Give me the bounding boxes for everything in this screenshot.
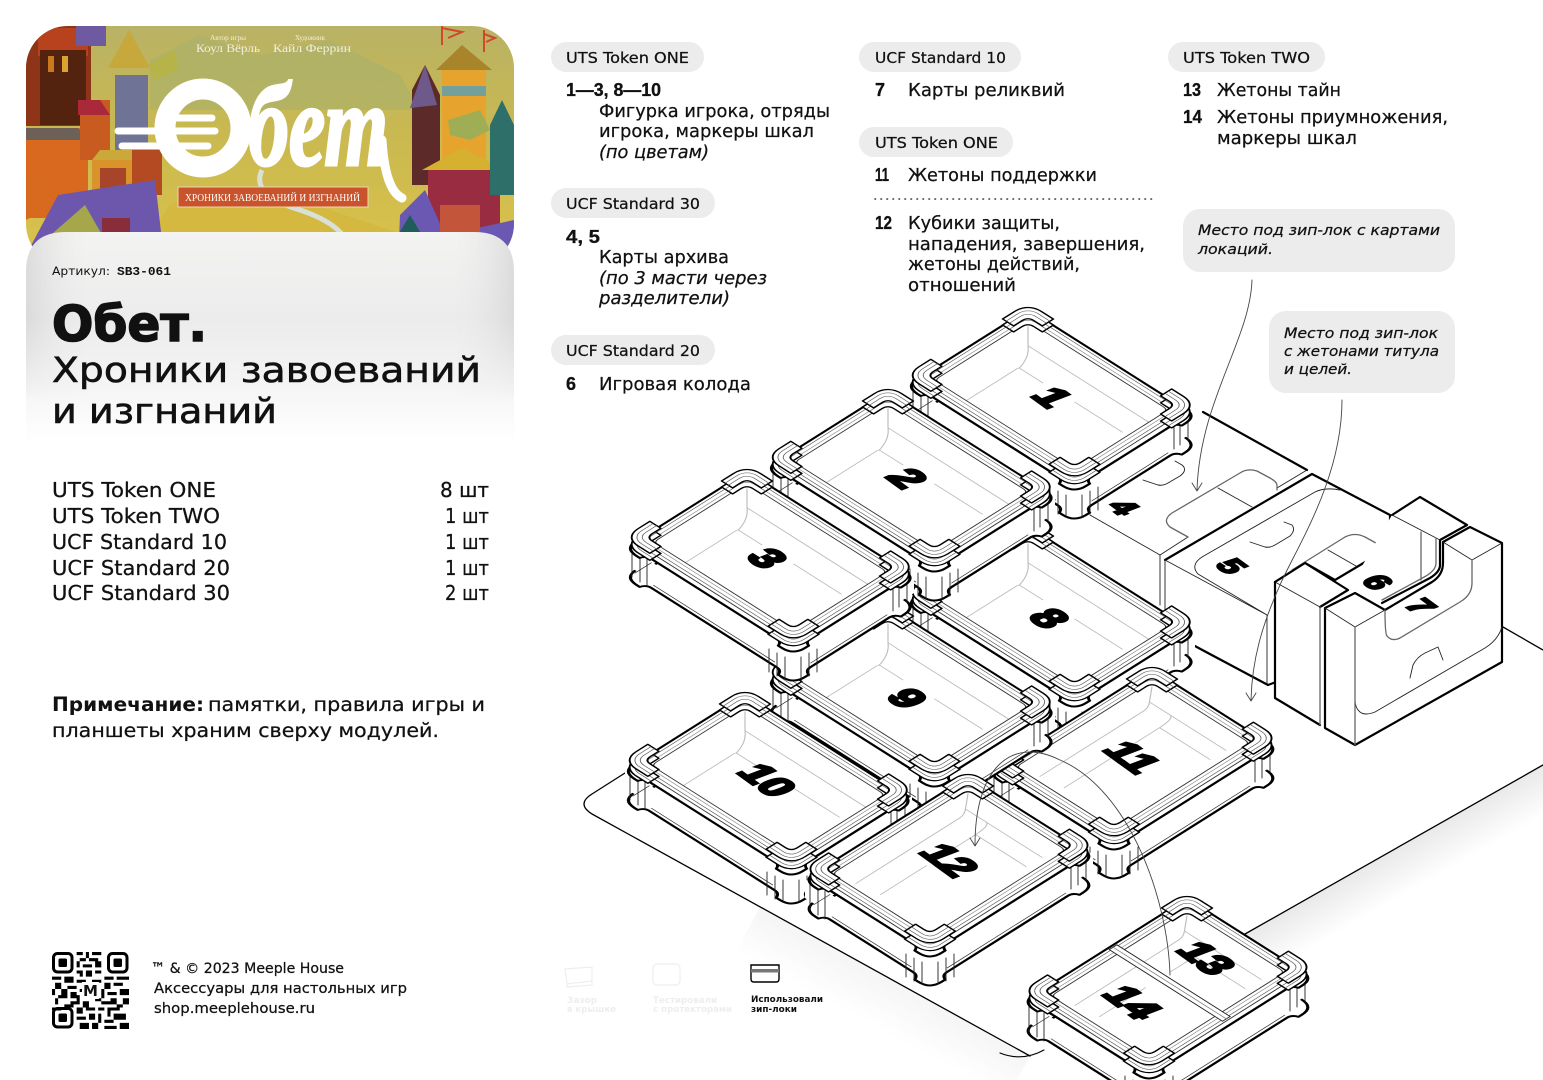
tray 9 [765, 600, 1057, 819]
column 1: UCF Standard 30: Карты архива [599, 248, 729, 268]
box 5 [1165, 474, 1392, 690]
list of organizers: 1 шт [445, 556, 489, 580]
column 1: UCF Standard 30: 4, 5 [566, 227, 600, 247]
column 2: UTS Token ONE: Жетоны поддержки [908, 166, 1097, 186]
list of organizers: 1 шт [445, 504, 489, 528]
column 2: UCF Standard 10: 7 [875, 80, 885, 100]
list of organizers: 1 шт [445, 530, 489, 554]
copyright footer: ™ & © 2023 Meeple House [151, 961, 344, 977]
cover credits [196, 34, 352, 55]
callout: location cards zip-lock: локаций. [1197, 242, 1273, 258]
list of organizers: UTS Token ONE [52, 478, 216, 502]
column 3: UTS Token TWO: Жетоны приумножения, [1217, 108, 1448, 128]
column 1: UTS Token ONE: игрока, маркеры шкал [599, 122, 814, 142]
legend: zip-locks used: зип-локи [751, 1005, 797, 1015]
list of organizers: UCF Standard 20 [52, 556, 230, 580]
column 2: UTS Token ONE: нападения, завершения, [908, 235, 1145, 255]
title [52, 296, 481, 432]
list of organizers: UCF Standard 10 [52, 530, 227, 554]
column 3: UTS Token TWO: маркеры шкал [1217, 129, 1357, 149]
tray 1 [905, 303, 1197, 522]
arrow from tray 13 to tray 12 [970, 752, 1170, 975]
tray 2: 2 [876, 463, 938, 493]
column 1: UTS Token ONE: (по цветам) [599, 143, 709, 163]
tray 8: 8 [1018, 603, 1080, 633]
legend: tested with protectors (inactive): с протекторами [653, 1005, 732, 1015]
tray 11 [987, 663, 1279, 882]
tray 10: 10 [727, 759, 807, 802]
panel: title card background [26, 232, 514, 400]
note: планшеты храним сверху модулей. [52, 719, 439, 742]
tray 12 [803, 770, 1095, 989]
copyright footer: Аксессуары для настольных игр [154, 981, 407, 997]
column 2: UTS Token ONE: 12 [875, 213, 892, 233]
column 1: UCF Standard 20: 6 [566, 374, 576, 394]
cover banner: ХРОНИКИ ЗАВОЕВАНИЙ И ИЗГНАНИЙ [185, 192, 360, 204]
box 7 [1325, 527, 1502, 745]
callout: title and goal tokens zip-lock: с жетонами титула [1284, 344, 1439, 360]
article number: SB3-061 [117, 265, 171, 279]
column 2: UCF Standard 10: Карты реликвий [908, 81, 1065, 101]
tray 13 and 14: 14 [1092, 981, 1172, 1024]
QR code: М [83, 982, 98, 1000]
cover credits: Кайл Феррин [273, 41, 352, 55]
tray 3 [624, 465, 916, 684]
tray 8 [905, 520, 1197, 739]
legend: tested with protectors (inactive): Тестировали [653, 996, 717, 1006]
column 1: UTS Token ONE: Фигурка игрока, отряды [599, 102, 830, 122]
copyright footer [151, 961, 407, 1017]
tray 13 and 14 [1022, 892, 1314, 1080]
box 6 [1275, 497, 1467, 725]
panel: game cover art [26, 26, 514, 266]
cover credits: Художник [295, 34, 326, 42]
tray 3: 3 [736, 543, 798, 573]
note [52, 693, 485, 742]
column 1: UCF Standard 30: разделители) [598, 289, 730, 309]
column 2: UTS Token ONE: отношений [908, 276, 1016, 296]
column 2: UTS Token ONE: жетоны действий, [908, 255, 1080, 275]
column 1: UCF Standard 30 [551, 188, 767, 309]
cover title: бет [248, 60, 388, 191]
list of organizers: 8 шт [440, 478, 489, 502]
cover banner [178, 187, 368, 207]
note: памятки, правила игры и [208, 693, 485, 716]
column 2: UCF Standard 10: UCF Standard 10 [875, 49, 1006, 67]
cover title [118, 60, 402, 198]
legend: lid gap (inactive): в крышке [567, 1005, 616, 1015]
tray 13 and 14: 13 [1166, 937, 1246, 980]
cover credits: Коул Вёрль [196, 41, 261, 55]
QR code [52, 952, 129, 1029]
box 4 [1060, 412, 1307, 640]
base board outline [584, 627, 1543, 1057]
legend: zip-locks used: Использовали [751, 995, 823, 1005]
callout: location cards zip-lock: Место под зип-лок с картами [1198, 223, 1440, 239]
column 1: UTS Token ONE: UTS Token ONE [566, 49, 689, 67]
tray 1: 1 [1021, 382, 1083, 412]
article number [52, 264, 171, 279]
list of organizers: 2 шт [445, 581, 489, 605]
column 3: UTS Token TWO: UTS Token TWO [1183, 49, 1310, 67]
callout: title and goal tokens zip-lock [1269, 311, 1455, 393]
list of organizers [52, 478, 489, 605]
column 3: UTS Token TWO: 13 [1183, 80, 1201, 100]
list of organizers: UCF Standard 30 [52, 581, 230, 605]
number 5: 5 [1207, 555, 1256, 578]
tray 10 [622, 688, 914, 907]
legend: lid gap (inactive): Зазор [567, 996, 597, 1006]
column 2: UTS Token ONE: 11 [875, 165, 889, 185]
column 1: UCF Standard 30: UCF Standard 30 [566, 195, 700, 213]
column 1: UCF Standard 20 [551, 335, 751, 395]
legend: zip-locks used [751, 965, 823, 1015]
legend: tested with protectors (inactive) [653, 964, 732, 1015]
title: и изгнаний [52, 392, 277, 432]
column 3: UTS Token TWO [1168, 42, 1448, 149]
callout: title and goal tokens zip-lock: Место под зип-лок [1284, 326, 1438, 342]
arrow to location cards slot [1192, 280, 1252, 491]
column 1: UTS Token ONE: 1—3, 8—10 [566, 80, 661, 100]
callout: title and goal tokens zip-lock: и целей. [1284, 362, 1352, 378]
column 2: UTS Token ONE [859, 127, 1155, 296]
cover credits: Автор игры [210, 34, 246, 42]
column 1: UCF Standard 20: Игровая колода [599, 375, 751, 395]
column 1: UTS Token ONE [551, 42, 830, 163]
title: Обет. [52, 296, 207, 353]
tray 12: 12 [909, 839, 989, 882]
number 6: 6 [1353, 571, 1402, 594]
article number: Артикул: [52, 264, 110, 278]
tray 2 [765, 385, 1057, 604]
tray 11: 11 [1093, 736, 1171, 778]
column 3: UTS Token TWO: 14 [1183, 107, 1202, 127]
legend: lid gap (inactive) [565, 967, 616, 1015]
column 1: UCF Standard 30: (по 3 масти через [599, 269, 767, 289]
column 2: UCF Standard 10 [859, 42, 1065, 101]
arrow to title tokens slot [1246, 400, 1342, 701]
column 2: UTS Token ONE: UTS Token ONE [875, 134, 998, 152]
callout: location cards zip-lock [1183, 209, 1455, 272]
number 7: 7 [1396, 595, 1445, 618]
note: Примечание: [52, 693, 204, 716]
column 1: UCF Standard 20: UCF Standard 20 [566, 342, 700, 360]
list of organizers: UTS Token TWO [52, 504, 220, 528]
tray 9: 9 [876, 683, 938, 713]
board shadow [736, 765, 1543, 1080]
title: Хроники завоеваний [52, 351, 481, 391]
copyright footer: shop.meeplehouse.ru [154, 1001, 315, 1017]
column 3: UTS Token TWO: Жетоны тайн [1217, 81, 1341, 101]
column 2: UTS Token ONE: Кубики защиты, [908, 214, 1060, 234]
number 4: 4 [1099, 496, 1148, 519]
